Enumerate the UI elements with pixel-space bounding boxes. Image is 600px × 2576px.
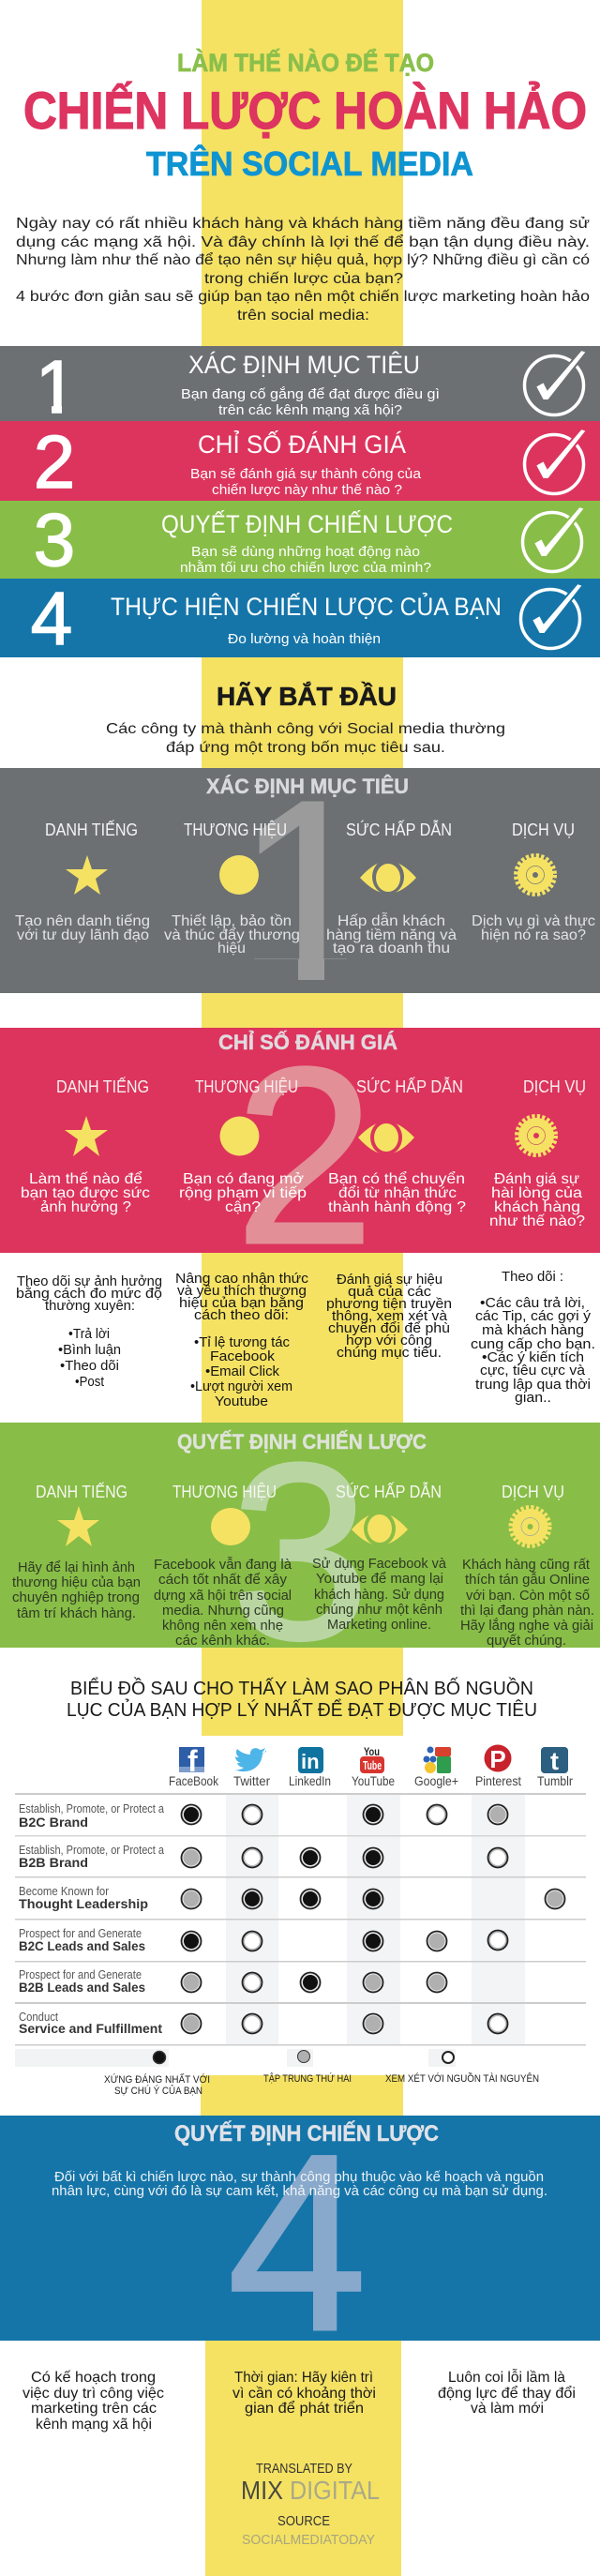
column headers: DỊCH VỤ bbox=[502, 1483, 564, 1501]
note column 2: Nâng cao nhận thức bbox=[175, 1271, 309, 1287]
column headers: SỨC HẤP DẪN bbox=[346, 820, 452, 839]
large numeral 1: 1 bbox=[235, 747, 379, 1034]
note column 4: •Các câu trả lời, bbox=[480, 1295, 585, 1311]
column descriptions: Bạn có đang mở bbox=[183, 1171, 305, 1187]
section heading: XÁC ĐỊNH MỤC TIÊU bbox=[206, 775, 409, 798]
column descriptions bbox=[15, 913, 595, 957]
column headers: DANH TIẾNG bbox=[36, 1482, 128, 1501]
large numeral 2: 2 bbox=[234, 1015, 375, 1296]
column headers bbox=[45, 820, 575, 839]
step 2 band: 2 bbox=[34, 420, 75, 504]
note column 3: chúng mục tiêu. bbox=[337, 1345, 442, 1361]
title line 3: TRÊN SOCIAL MEDIA bbox=[146, 143, 473, 183]
icon: linkedin bbox=[298, 1747, 323, 1773]
note column 4 bbox=[471, 1269, 595, 1406]
note column 3 bbox=[326, 1272, 452, 1361]
column headers: THƯƠNG HIỆU bbox=[172, 1483, 277, 1501]
step 1 band: 1 bbox=[36, 345, 77, 429]
intro paragraph: dụng các mạng xã hội. Và đây chính là lợi thế để bạn tận dụng điều này. bbox=[16, 234, 590, 250]
icon: circle bbox=[219, 1116, 259, 1155]
icon: facebook: f bbox=[188, 1744, 198, 1778]
note column 3: thông, xem xét và bbox=[332, 1308, 448, 1324]
subheading: đáp ứng một trong bốn mục tiêu sau. bbox=[166, 740, 445, 756]
icon: tumblr bbox=[541, 1747, 568, 1775]
note column 2 bbox=[175, 1271, 309, 1409]
column headers: THƯƠNG HIỆU bbox=[195, 1077, 298, 1096]
note column 1: •Trả lời bbox=[68, 1326, 110, 1342]
step 2 band bbox=[0, 420, 600, 504]
icon: youtube: Tube bbox=[363, 1758, 382, 1772]
step 3 band: nhằm tối ưu cho chiến lược của mình? bbox=[180, 560, 431, 576]
row labels: Conduct bbox=[19, 2011, 58, 2024]
icon: gear bbox=[516, 855, 555, 895]
note column 4: các Tip, các gợi ý bbox=[475, 1308, 592, 1324]
column descriptions: Bạn có thể chuyển bbox=[328, 1170, 465, 1187]
subheading: Các công ty mà thành công với Social media thường bbox=[106, 721, 505, 737]
tip 3 bbox=[438, 2368, 576, 2417]
credits bbox=[241, 2462, 380, 2548]
panel: tracking notes bbox=[16, 1269, 595, 1409]
column descriptions: thì lại đang phàn nàn. bbox=[460, 1603, 594, 1619]
icon: star bbox=[65, 1116, 108, 1156]
icon: pinterest: P bbox=[489, 1745, 506, 1773]
step 3 band: Bạn sẽ dùng những hoạt động nào bbox=[191, 545, 420, 560]
legend: TẬP TRUNG THỨ HAI bbox=[263, 2072, 352, 2085]
column descriptions: Marketing online. bbox=[327, 1617, 431, 1633]
row labels: B2C Brand bbox=[19, 1815, 88, 1830]
icon: twitter bbox=[234, 1748, 266, 1771]
intro paragraph: Ngày nay có rất nhiều khách hàng và khách hàng tiềm năng đều đang sử bbox=[16, 216, 590, 232]
tip 1 bbox=[22, 2370, 164, 2433]
icon: youtube bbox=[360, 1745, 384, 1773]
matrix dots bbox=[182, 1804, 564, 2033]
row labels bbox=[19, 1802, 164, 2036]
column headers: DỊCH VỤ bbox=[512, 821, 575, 839]
step 4 band: Đo lường và hoàn thiện bbox=[228, 632, 381, 647]
note column 1 bbox=[16, 1273, 162, 1390]
section heading: QUYẾT ĐỊNH CHIẾN LƯỢC bbox=[174, 2120, 439, 2147]
step 1 band bbox=[0, 346, 600, 421]
row labels: Establish, Promote, or Protect a bbox=[19, 1844, 164, 1857]
column headers: DỊCH VỤ bbox=[523, 1077, 586, 1096]
icon: linkedin: in bbox=[301, 1750, 320, 1773]
column headers: DANH TIẾNG bbox=[45, 820, 138, 839]
column descriptions: thành hành động ? bbox=[328, 1199, 466, 1215]
credits: SOURCE bbox=[278, 2513, 330, 2529]
row labels: B2B Brand bbox=[19, 1855, 88, 1870]
column descriptions: rộng phạm vi tiếp bbox=[179, 1185, 307, 1201]
column descriptions: Đánh giá sự bbox=[494, 1171, 579, 1187]
credits: SOCIALMEDIATODAY bbox=[242, 2532, 375, 2548]
legend: XỨNG ĐÁNG NHẤT VỚI bbox=[104, 2073, 210, 2086]
note column 3: Đánh giá sự hiệu bbox=[337, 1272, 442, 1288]
step 1 band: Bạn đang cố gắng để đạt được điều gì bbox=[181, 386, 440, 402]
column descriptions: Khách hàng cũng rất bbox=[462, 1557, 591, 1573]
column descriptions: Youtube để mang lại bbox=[316, 1571, 443, 1587]
column descriptions: thích tán gẫu Online bbox=[465, 1572, 590, 1588]
note column 1: •Post bbox=[75, 1374, 105, 1390]
chart heading bbox=[67, 1677, 537, 1721]
step 3 band bbox=[0, 498, 600, 581]
column descriptions: cận? bbox=[225, 1199, 261, 1215]
step 4 band bbox=[0, 577, 600, 660]
intro paragraph: trên social media: bbox=[237, 308, 369, 324]
column descriptions: quyết chúng. bbox=[487, 1633, 566, 1649]
column descriptions: bạn tạo được sức bbox=[21, 1185, 150, 1201]
column descriptions: Hấp dẫn khách bbox=[338, 913, 445, 929]
row labels: B2C Leads and Sales bbox=[19, 1938, 145, 1953]
icon: facebook bbox=[179, 1744, 204, 1778]
network labels: FaceBook bbox=[169, 1773, 219, 1788]
note column 4: cực, tiêu cực và bbox=[480, 1363, 586, 1378]
panel: four steps overview bbox=[0, 345, 600, 660]
note column 4: gian.. bbox=[515, 1390, 551, 1406]
note column 2: •Email Click bbox=[205, 1363, 279, 1379]
panel: social network matrix chart bbox=[15, 1744, 586, 2097]
column descriptions: chuyên nghiệp trong bbox=[12, 1589, 140, 1605]
column descriptions: và thúc đẩy thương bbox=[164, 927, 300, 943]
panel: section 4 implementation bbox=[0, 2101, 600, 2383]
chart heading: LỤC CỦA BẠN HỢP LÝ NHẤT ĐỂ ĐẠT ĐƯỢC MỤC TIÊU bbox=[67, 1698, 537, 1721]
panel: section 1 goals bbox=[0, 768, 600, 993]
column descriptions: khách hàng bbox=[494, 1199, 580, 1215]
note column 1: Theo dõi sự ảnh hưởng bbox=[17, 1273, 162, 1289]
column descriptions bbox=[21, 1170, 585, 1229]
column descriptions: tâm trí khách hàng. bbox=[17, 1605, 136, 1621]
column descriptions: như thế nào? bbox=[489, 1213, 585, 1229]
row labels: Service and Fulfillment bbox=[19, 2021, 162, 2036]
step 4 band: THỰC HIỆN CHIẾN LƯỢC CỦA BẠN bbox=[111, 593, 502, 621]
column descriptions: Sử dụng Facebook và bbox=[312, 1556, 447, 1572]
column headers: SỨC HẤP DẪN bbox=[336, 1482, 442, 1501]
tip 3: và làm mới bbox=[471, 2401, 544, 2417]
tip 3: động lực để thay đổi bbox=[438, 2385, 576, 2402]
large numeral 3: 3 bbox=[230, 1410, 370, 1692]
note column 4: trung lập qua thời bbox=[475, 1377, 591, 1393]
credits: TRANSLATED BY bbox=[256, 2462, 352, 2477]
title line 1: LÀM THẾ NÀO ĐỂ TẠO bbox=[177, 48, 434, 77]
network labels: Tumblr bbox=[537, 1773, 573, 1788]
column descriptions: Hãy để lại hình ảnh bbox=[18, 1559, 135, 1575]
column descriptions: cách tốt nhất để xây bbox=[158, 1572, 287, 1588]
note column 1: •Bình luận bbox=[58, 1342, 121, 1358]
row labels: Establish, Promote, or Protect a bbox=[19, 1802, 164, 1815]
icon: eye bbox=[358, 1120, 414, 1155]
column descriptions: Hãy lắng nghe và giải bbox=[460, 1618, 593, 1634]
column descriptions: tạo ra doanh thu bbox=[333, 941, 450, 957]
column descriptions: không nên xem nhẹ bbox=[162, 1618, 283, 1634]
column descriptions: đổi từ nhận thức bbox=[338, 1184, 457, 1201]
panel: section 3 strategy bbox=[0, 1410, 600, 1692]
row labels: Thought Leadership bbox=[19, 1896, 148, 1911]
step 3 band: QUYẾT ĐỊNH CHIẾN LƯỢC bbox=[161, 510, 453, 538]
note column 4: •Các ý kiến tích bbox=[482, 1349, 584, 1365]
note column 1: bằng cách đo mức độ bbox=[16, 1286, 162, 1302]
intro paragraph: Nhưng làm như thế nào để tạo nên sự hiệu quả, hợp lý? Những điều gì cần có bbox=[16, 252, 590, 268]
step 4 band: 4 bbox=[31, 577, 72, 660]
column descriptions: chúng như một kênh bbox=[316, 1602, 442, 1618]
note column 2: cách theo dõi: bbox=[194, 1307, 289, 1323]
section text: Đối với bất kì chiến lược nào, sự thành công phụ thuộc vào kế hoạch và nguồn bbox=[54, 2169, 544, 2185]
network labels: Twitter bbox=[233, 1773, 270, 1788]
step 1 band: XÁC ĐỊNH MỤC TIÊU bbox=[188, 351, 420, 379]
tip 1: marketing trên các bbox=[31, 2401, 157, 2417]
column headers: THƯƠNG HIỆU bbox=[184, 821, 287, 839]
credits: MIX bbox=[241, 2476, 283, 2505]
heading: let's start: HÃY BẮT ĐẦU bbox=[217, 682, 397, 711]
column descriptions: Thiết lập, bảo tồn bbox=[172, 913, 292, 929]
step 2 band: CHỈ SỐ ĐÁNH GIÁ bbox=[198, 430, 406, 459]
icon: eye bbox=[360, 859, 416, 895]
note column 3: phương tiện truyền bbox=[326, 1296, 452, 1312]
icon: circle bbox=[219, 855, 259, 895]
icon: pinterest bbox=[484, 1744, 512, 1773]
column descriptions: hiệu bbox=[218, 941, 246, 957]
tip 1: Có kế hoạch trong bbox=[31, 2370, 156, 2386]
note column 1: •Theo dõi bbox=[60, 1358, 119, 1374]
column descriptions: Dịch vụ gì và thực bbox=[472, 913, 595, 929]
tip 2: Thời gian: Hãy kiên trì bbox=[234, 2370, 373, 2386]
column descriptions: ảnh hưởng ? bbox=[40, 1199, 131, 1215]
tip 1: việc duy trì công việc bbox=[22, 2386, 164, 2402]
column descriptions: khách hàng. Sử dụng bbox=[314, 1587, 444, 1603]
note column 3: chuyển đổi để phù bbox=[328, 1320, 450, 1336]
row labels: B2B Leads and Sales bbox=[19, 1980, 145, 1995]
column headers bbox=[36, 1482, 564, 1501]
icon: eye bbox=[352, 1511, 408, 1546]
section text: nhân lực, cùng với đó là sự cam kết, khả năng và các công cụ mà bạn sử dụng. bbox=[52, 2183, 548, 2199]
column headers: DANH TIẾNG bbox=[56, 1077, 149, 1096]
note column 2: hiệu của bạn bằng bbox=[179, 1295, 304, 1311]
large numeral 4: 4 bbox=[227, 2101, 368, 2383]
row labels: Prospect for and Generate bbox=[19, 1968, 142, 1981]
credits: DIGITAL bbox=[290, 2476, 380, 2505]
icon: star bbox=[57, 1506, 99, 1546]
note column 2: Facebook bbox=[210, 1348, 276, 1364]
column descriptions: hiện nó ra sao? bbox=[481, 927, 586, 943]
icon: gear bbox=[511, 1508, 549, 1545]
note column 4: cung cấp cho bạn. bbox=[471, 1336, 595, 1352]
column descriptions bbox=[12, 1556, 594, 1649]
legend bbox=[15, 2049, 539, 2097]
column headers bbox=[56, 1077, 586, 1096]
column descriptions: hài lòng của bbox=[491, 1185, 582, 1201]
icon: circle bbox=[211, 1508, 250, 1545]
note column 3: hợp với công bbox=[346, 1333, 432, 1348]
icon: google plus bbox=[424, 1746, 451, 1773]
section heading: CHỈ SỐ ĐÁNH GIÁ bbox=[218, 1030, 398, 1054]
network labels bbox=[169, 1773, 573, 1788]
note column 1: thường xuyên: bbox=[45, 1298, 135, 1314]
panel: section 2 metrics bbox=[0, 1015, 600, 1296]
column descriptions: thương hiệu của bạn bbox=[12, 1574, 141, 1590]
title bbox=[23, 48, 587, 183]
column descriptions: hàng tiềm năng và bbox=[326, 927, 457, 943]
icon: gear bbox=[518, 1116, 555, 1155]
note column 4: mà khách hàng bbox=[482, 1322, 584, 1338]
row labels: Become Known for bbox=[19, 1885, 109, 1898]
closing tips bbox=[22, 2368, 576, 2433]
step 2 band: chiến lược này như thế nào ? bbox=[212, 483, 402, 498]
note column 2: •Lượt người xem bbox=[190, 1378, 292, 1394]
note column 2: •Tỉ lệ tương tác bbox=[194, 1334, 290, 1350]
icon: tumblr: t bbox=[550, 1747, 559, 1775]
tip 2: vì cần có khoảng thời bbox=[232, 2386, 376, 2402]
column headers: SỨC HẤP DẪN bbox=[356, 1077, 463, 1096]
subheading bbox=[106, 721, 505, 756]
column descriptions: các kênh khác. bbox=[175, 1633, 270, 1649]
note column 3: quả của các bbox=[348, 1284, 432, 1300]
chart heading: BIỂU ĐỒ SAU CHO THẤY LÀM SAO PHÂN BỐ NGUỒN bbox=[70, 1677, 533, 1699]
network labels: LinkedIn bbox=[289, 1773, 331, 1788]
column descriptions: với tư duy lãnh đạo bbox=[17, 927, 149, 943]
intro paragraph: 4 bước đơn giản sau sẽ giúp bạn tạo nên một chiến lược marketing hoàn hảo bbox=[16, 289, 590, 305]
network labels: Google+ bbox=[414, 1773, 458, 1788]
column descriptions: dựng xã hội trên social bbox=[154, 1588, 292, 1604]
intro paragraph bbox=[16, 216, 590, 324]
tip 2: gian để phát triển bbox=[245, 2400, 364, 2417]
column descriptions: Facebook vẫn đang là bbox=[154, 1557, 292, 1573]
tip 1: kênh mạng xã hội bbox=[36, 2417, 152, 2433]
icon: youtube: You bbox=[364, 1745, 380, 1758]
tip 2 bbox=[232, 2370, 376, 2417]
column descriptions: với bạn. Còn một số bbox=[466, 1588, 591, 1604]
icon: star bbox=[66, 855, 108, 895]
step 3 band: 3 bbox=[34, 498, 75, 581]
section text bbox=[52, 2169, 548, 2199]
legend: XEM XÉT VỚI NGUỒN TÀI NGUYÊN bbox=[385, 2072, 539, 2085]
note column 2: Youtube bbox=[215, 1393, 268, 1409]
step 2 band: Bạn sẽ đánh giá sự thành công của bbox=[190, 467, 422, 482]
column descriptions: Tạo nên danh tiếng bbox=[15, 913, 150, 929]
section heading: QUYẾT ĐỊNH CHIẾN LƯỢC bbox=[177, 1430, 427, 1454]
intro paragraph: trong chiến lược của bạn? bbox=[204, 271, 403, 287]
note column 2: và yêu thích thương bbox=[177, 1283, 307, 1299]
column descriptions: Làm thế nào để bbox=[29, 1170, 142, 1187]
network labels: YouTube bbox=[352, 1773, 395, 1788]
legend: SỰ CHÚ Ý CỦA BẠN bbox=[114, 2085, 202, 2097]
note column 4: Theo dõi : bbox=[502, 1269, 563, 1285]
row labels: Prospect for and Generate bbox=[19, 1927, 142, 1940]
tip 3: Luôn coi lỗi lầm là bbox=[448, 2368, 565, 2386]
step 1 band: trên các kênh mạng xã hội? bbox=[218, 403, 402, 418]
network labels: Pinterest bbox=[475, 1773, 521, 1788]
column descriptions: media. Nhưng cũng bbox=[162, 1603, 284, 1619]
